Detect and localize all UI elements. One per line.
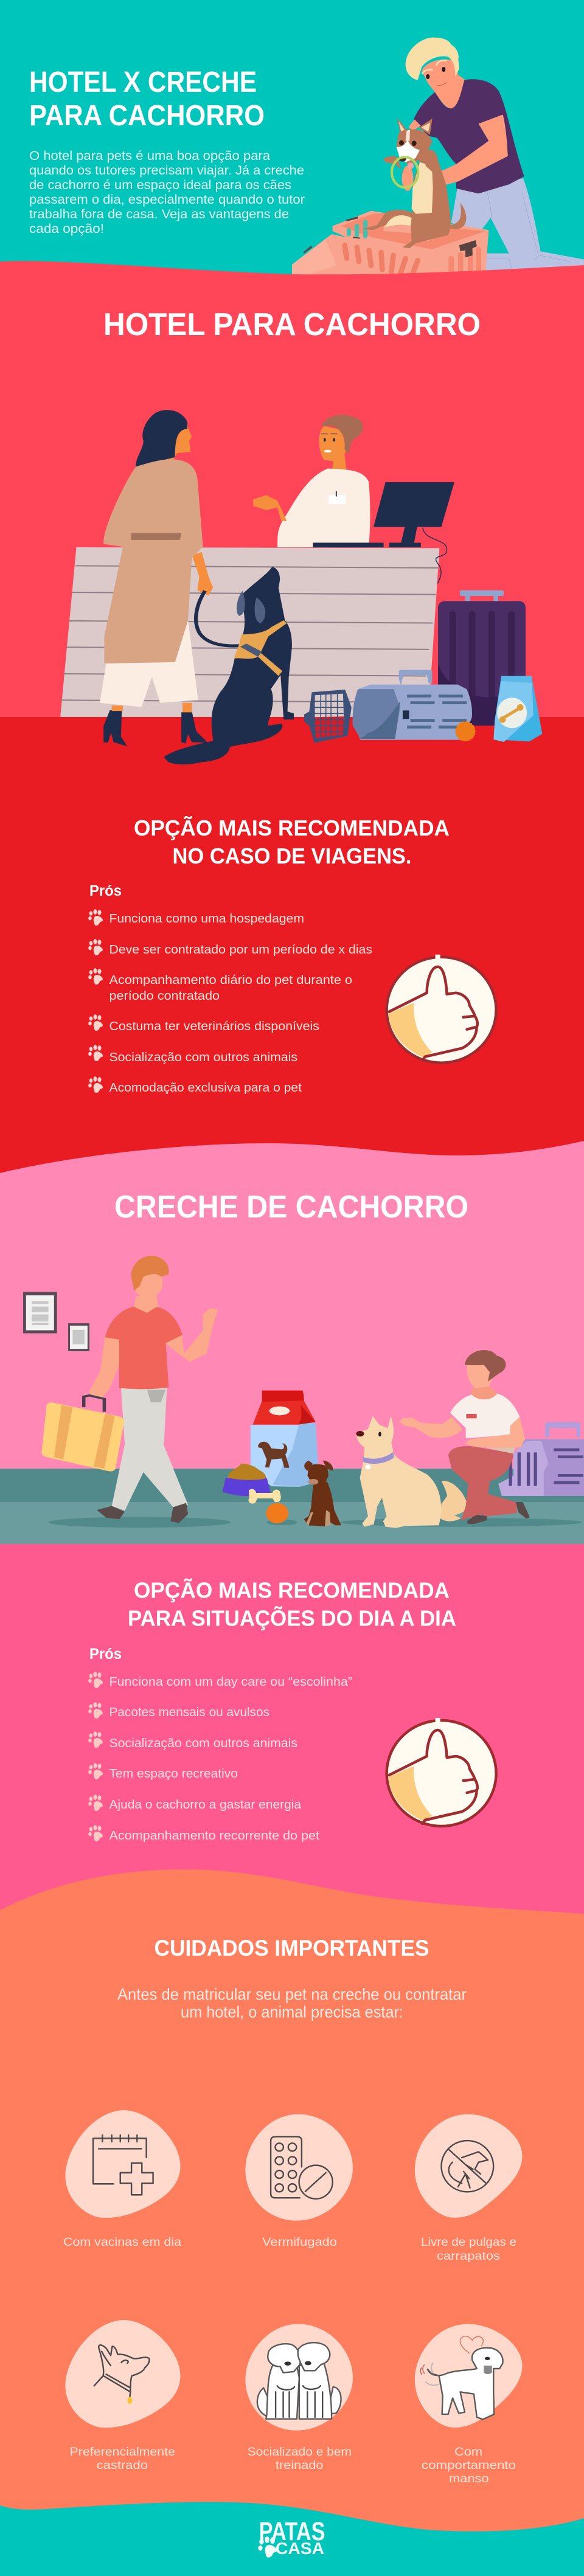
list item 6: Acomodação exclusiva para o pet bbox=[109, 1081, 302, 1095]
intro text: quando os tutores precisam viajar. Já a creche bbox=[29, 163, 304, 178]
small carrier bbox=[304, 690, 352, 743]
panel: creche de cachorro bbox=[0, 1141, 584, 1921]
icon: dog profile with collar bbox=[65, 2320, 180, 2428]
panel: cuidados importantes bbox=[0, 1869, 584, 2536]
logo: patas em casa: CASA bbox=[276, 2539, 324, 2558]
carrier purple bbox=[498, 1422, 584, 1496]
floor shadows bbox=[266, 1518, 582, 1527]
suitcase bbox=[438, 590, 526, 725]
bone bbox=[249, 1489, 281, 1504]
intro text: passarem o dia, especialmente quando o tutor bbox=[29, 192, 305, 207]
heading: recommendation hotel: NO CASO DE VIAGENS. bbox=[173, 843, 411, 868]
card: pulgas: Livre de pulgas e bbox=[421, 2235, 516, 2249]
list item 4: Tem espaço recreativo bbox=[109, 1767, 238, 1781]
intro text: de cachorro é um espaço ideal para os cães bbox=[29, 178, 291, 192]
list item 2: Deve ser contratado por um período de x dias bbox=[109, 943, 372, 957]
heading: recommendation creche bbox=[128, 1577, 456, 1631]
band below scene bbox=[0, 1544, 584, 1921]
list item 3: Socialização com outros animais bbox=[109, 1736, 297, 1750]
list item 5: Ajuda o cachorro a gastar energia bbox=[109, 1798, 302, 1812]
food bag bbox=[251, 1391, 319, 1487]
panel: hotel para cachorro bbox=[0, 261, 584, 1191]
heading: recommendation hotel: OPÇÃO MAIS RECOMENDADA bbox=[134, 815, 450, 840]
illustration: daycare scene bbox=[23, 1256, 584, 1528]
icon: calendar with cross bbox=[65, 2110, 180, 2218]
heading: recommendation hotel bbox=[134, 815, 450, 868]
logo: patas em casa bbox=[258, 2517, 325, 2558]
large cream dog bbox=[356, 1416, 468, 1528]
receptionist bbox=[253, 415, 370, 547]
heading: hotel para cachorro: HOTEL PARA CACHORRO bbox=[103, 307, 481, 342]
dog with leash bbox=[164, 567, 294, 764]
icon: no fleas bbox=[415, 2114, 522, 2218]
list item 6: Acompanhamento recorrente do pet bbox=[109, 1829, 319, 1843]
list: prós creche bbox=[88, 1646, 352, 1843]
icon: thumbs up creche bbox=[387, 1718, 496, 1826]
card: socializado: Socializado e bem bbox=[248, 2445, 352, 2459]
computer bbox=[313, 482, 454, 583]
list item 3 bbox=[88, 1731, 297, 1750]
heading: recommendation creche: OPÇÃO MAIS RECOMENDADA bbox=[134, 1577, 450, 1603]
card: pulgas bbox=[415, 2114, 522, 2263]
subheading text: Antes de matricular seu pet na creche ou contratar bbox=[117, 1985, 467, 2003]
icon: happy dog with heart bbox=[415, 2324, 522, 2428]
icon: pill blister bbox=[245, 2114, 353, 2221]
card: castrado: castrado bbox=[97, 2459, 148, 2472]
card: manso: manso bbox=[449, 2472, 489, 2485]
panel: intro bbox=[0, 0, 584, 286]
list: prós creche: Prós bbox=[89, 1646, 122, 1663]
toy ball bbox=[456, 722, 475, 741]
list: prós hotel bbox=[88, 882, 372, 1095]
list item 4 bbox=[88, 1763, 238, 1781]
list item 3 bbox=[88, 968, 352, 1003]
crate back bbox=[333, 211, 488, 274]
woman head bbox=[465, 1350, 506, 1398]
illustration: man with dog and crate bbox=[292, 38, 584, 280]
card: castrado: Preferencialmente bbox=[69, 2445, 175, 2459]
woman bbox=[100, 410, 213, 746]
card: manso: Com bbox=[454, 2445, 482, 2459]
card: manso: comportamento bbox=[422, 2459, 516, 2472]
subheading text: um hotel, o animal precisa estar: bbox=[181, 2003, 403, 2021]
list: prós hotel: Prós bbox=[89, 882, 122, 899]
dog bbox=[362, 117, 466, 248]
card: vermifugado bbox=[245, 2114, 353, 2249]
ball bbox=[266, 1503, 288, 1523]
shadow bbox=[49, 1517, 231, 1528]
list item 4 bbox=[88, 1014, 319, 1033]
card: socializado: treinado bbox=[276, 2459, 324, 2472]
subheading text bbox=[117, 1985, 467, 2021]
list item 5 bbox=[88, 1045, 297, 1064]
card: socializado bbox=[245, 2324, 353, 2472]
reception desk bbox=[60, 547, 439, 717]
list item 2: Pacotes mensais ou avulsos bbox=[109, 1705, 269, 1719]
intro text bbox=[29, 148, 305, 236]
card: manso bbox=[415, 2324, 522, 2485]
icon: thumbs up hotel bbox=[387, 955, 496, 1063]
intro text: trabalha fora de casa. Veja as vantagens de bbox=[29, 207, 289, 221]
list item 6 bbox=[88, 1825, 319, 1843]
list item 6 bbox=[88, 1076, 302, 1095]
list item 4: Costuma ter veterinários disponíveis bbox=[109, 1019, 319, 1033]
list item 1: Funciona com um day care ou “escolinha” bbox=[109, 1675, 352, 1689]
intro text: O hotel para pets é uma boa opção para bbox=[29, 148, 270, 163]
food bag bbox=[493, 676, 542, 742]
icon: two fluffy dogs bbox=[245, 2324, 353, 2431]
crate lid bbox=[292, 234, 432, 280]
bowl with kibble bbox=[223, 1464, 271, 1496]
large carrier bbox=[353, 670, 472, 740]
title: HOTEL X CRECHE bbox=[29, 66, 257, 99]
wall frames bbox=[23, 1292, 89, 1351]
list item 3: Acompanhamento diário do pet durante o bbox=[109, 973, 352, 987]
card: vermifugado: Vermifugado bbox=[262, 2235, 337, 2249]
card: vacinas: Com vacinas em dia bbox=[63, 2235, 181, 2249]
heading: creche de cachorro: CRECHE DE CACHORRO bbox=[114, 1189, 468, 1225]
list item 5: Socialização com outros animais bbox=[109, 1050, 297, 1064]
small brown dog bbox=[304, 1461, 341, 1526]
man with suitcase bbox=[41, 1256, 218, 1523]
panel: footer bbox=[0, 2502, 584, 2576]
logo: patas em casa: PATAS bbox=[259, 2517, 325, 2546]
intro text: cada opção! bbox=[29, 221, 104, 236]
illustration: hotel reception bbox=[60, 410, 542, 764]
card: vacinas bbox=[63, 2110, 181, 2249]
heading: cuidados importantes: CUIDADOS IMPORTANTES bbox=[155, 1936, 429, 1961]
card: castrado bbox=[65, 2320, 180, 2472]
list item 3: período contratado bbox=[109, 989, 220, 1003]
heading: recommendation creche: PARA SITUAÇÕES DO DIA A DIA bbox=[128, 1605, 456, 1631]
man bbox=[406, 38, 584, 280]
woman kneeling bbox=[400, 1387, 530, 1524]
title: PARA CACHORRO bbox=[29, 100, 265, 132]
title bbox=[29, 66, 265, 132]
card: pulgas: carrapatos bbox=[437, 2249, 500, 2263]
list item 1: Funciona como uma hospedagem bbox=[109, 912, 304, 926]
